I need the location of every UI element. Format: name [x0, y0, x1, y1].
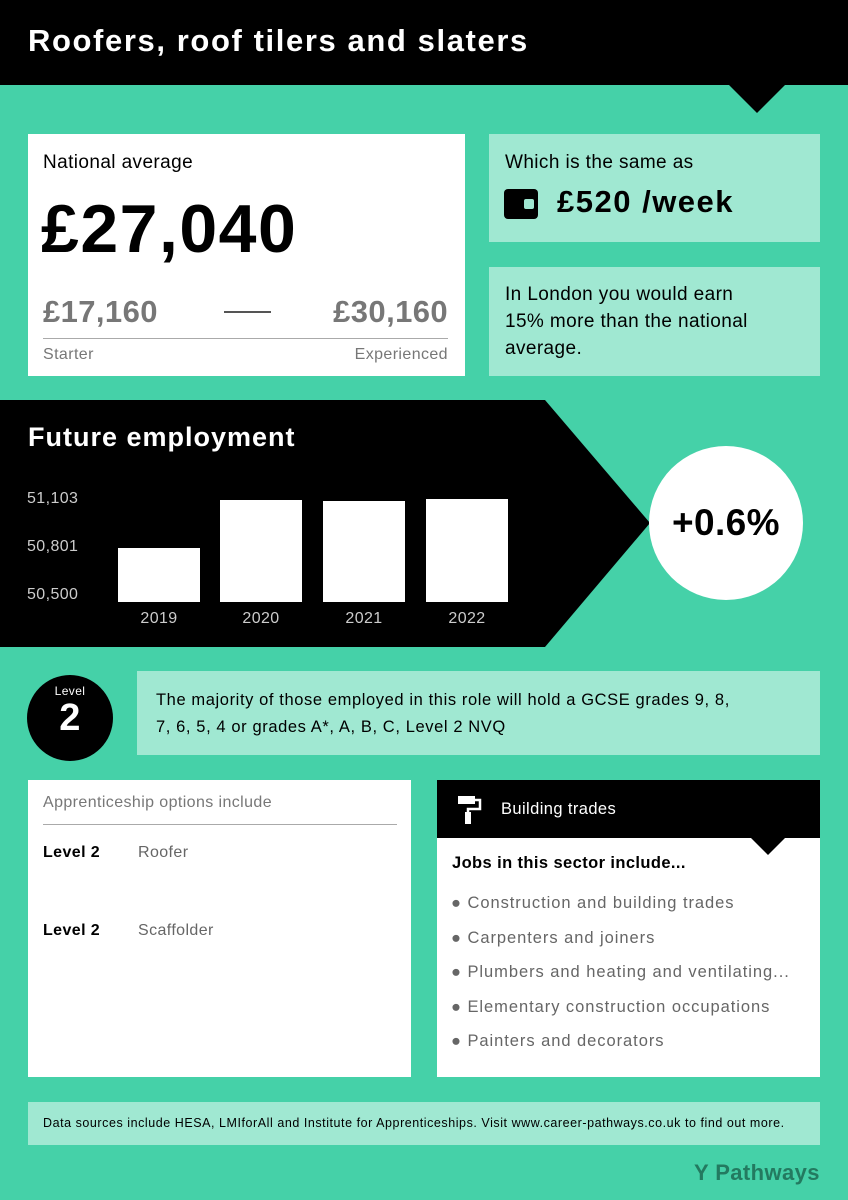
- panel: national average: Starter: [43, 346, 94, 363]
- panel: national average: £30,160: [333, 294, 448, 329]
- bar chart: 2020: [242, 610, 280, 627]
- icon: level badge: 2: [59, 697, 81, 739]
- panel: building trades: ● Carpenters and joiners: [451, 928, 655, 946]
- icon: paint roller: [458, 796, 482, 824]
- text block: qualification: The majority of those employed in this role will hold a GCSE grades 9, 8, 7, 6, 5, 4 or grades A*, A, B, C, Level 2 NVQ: [156, 691, 730, 736]
- icon: level badge: Level: [55, 684, 85, 698]
- panel: apprenticeships: Apprenticeship options include: [43, 794, 272, 811]
- panel: apprenticeships: Level 2: [43, 922, 100, 939]
- bar chart: 51,103: [27, 490, 78, 507]
- icon: wallet: [504, 189, 538, 219]
- panel: national average: Experienced: [355, 346, 448, 363]
- panel: london: In London you would earn 15% more than the national average.: [505, 284, 748, 359]
- title: Roofers, roof tilers and slaters: [28, 23, 529, 58]
- bar chart: 2022: [448, 610, 486, 627]
- bar chart: [27, 490, 508, 627]
- panel: apprenticeships: Level 2: [43, 844, 100, 861]
- panel: building trades: [437, 780, 820, 1077]
- panel: apprenticeships: Roofer: [138, 844, 188, 861]
- logo: Y Pathways: [694, 1160, 820, 1185]
- bar chart: 2019: [140, 610, 178, 627]
- bar chart: 50,801: [27, 538, 78, 555]
- panel: weekly: Which is the same as: [505, 152, 694, 173]
- icon: level badge: [27, 675, 113, 761]
- panel: national average: [28, 134, 465, 376]
- callout: growth circle: +0.6%: [672, 502, 780, 543]
- header: [0, 0, 848, 113]
- callout: growth circle: [649, 446, 803, 600]
- panel: building trades: ● Elementary construction occupations: [451, 998, 770, 1016]
- panel: london: [489, 267, 820, 376]
- panel: building trades: ● Construction and building trades: [451, 894, 734, 912]
- footer: data sources: Data sources include HESA, LMIforAll and Institute for Apprenticeships. Visit www.career-pathways.co.uk to find out more.: [43, 1116, 785, 1130]
- panel: building trades: Building trades: [501, 800, 616, 818]
- panel: apprenticeships: Scaffolder: [138, 922, 214, 939]
- footer: data sources: [28, 1102, 820, 1145]
- text block: qualification: [137, 671, 820, 755]
- panel: weekly: £520 /week: [557, 184, 734, 219]
- panel: weekly: [489, 134, 820, 242]
- bar chart: 2021: [345, 610, 383, 627]
- panel: future employment: [0, 400, 650, 647]
- panel: apprenticeships: [28, 780, 411, 1077]
- panel: national average: National average: [43, 152, 193, 173]
- salary figure: £27,040: [41, 191, 297, 267]
- panel: national average: £17,160: [43, 294, 158, 329]
- panel: building trades: Jobs in this sector include...: [452, 854, 686, 872]
- panel: building trades: ● Plumbers and heating and ventilating...: [451, 963, 790, 981]
- panel: future employment: Future employment: [28, 422, 296, 452]
- panel: building trades: ● Painters and decorators: [451, 1032, 664, 1050]
- bar chart: 50,500: [27, 586, 78, 603]
